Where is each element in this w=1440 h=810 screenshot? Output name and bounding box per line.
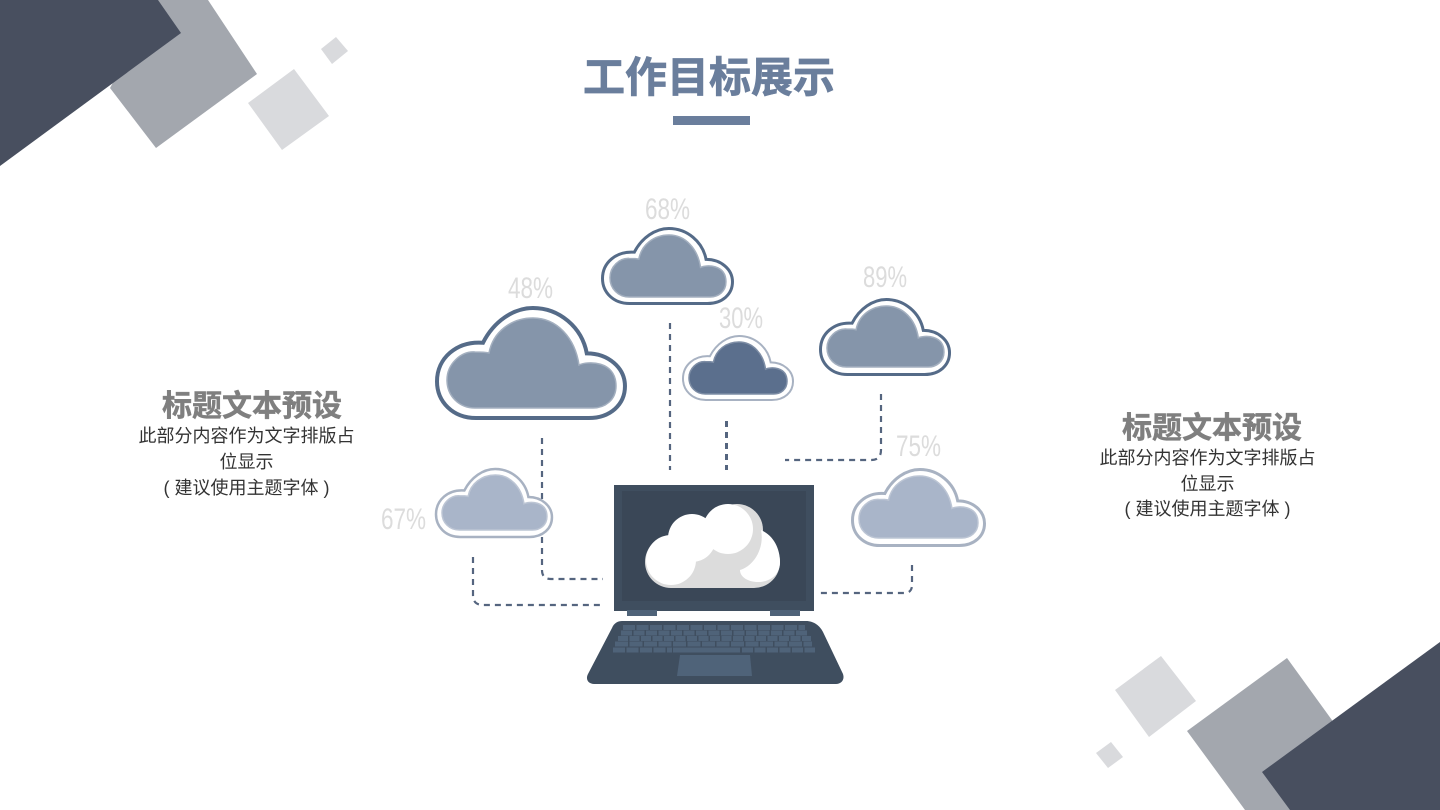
screen cloud icon: [645, 504, 780, 588]
right body text: 此部分内容作为文字排版占: [1100, 448, 1316, 468]
keyboard: [613, 628, 815, 650]
right body text: 位显示: [1180, 474, 1234, 494]
right heading: 标题文本预设: [1122, 412, 1302, 445]
cloud 67%: [436, 469, 552, 537]
label 68%: 68%: [645, 193, 690, 226]
title underline: [673, 116, 750, 125]
left heading: 标题文本预设: [162, 390, 342, 423]
left body text: 位显示: [220, 452, 274, 472]
decoration: bottom-right corner shapes: [1096, 642, 1440, 810]
cloud 75%: [852, 470, 984, 546]
label 67%: 67%: [381, 503, 426, 536]
title: 工作目标展示: [583, 54, 835, 101]
label 30%: 30%: [719, 302, 763, 335]
right text block: [1100, 412, 1316, 519]
left body text: 此部分内容作为文字排版占: [138, 426, 354, 446]
label 89%: 89%: [863, 261, 907, 294]
left body text: ( 建议使用主题字体 ): [164, 478, 330, 498]
label 48%: 48%: [508, 272, 553, 305]
cloud 68%: [602, 228, 732, 304]
dashed connectors: [473, 323, 912, 605]
laptop: [587, 485, 844, 684]
left text block: [138, 390, 354, 498]
laptop hinges: [627, 610, 800, 616]
cloud 89%: [820, 300, 950, 375]
label 75%: 75%: [896, 430, 941, 463]
laptop screen: [614, 485, 814, 611]
cloud 48%: [437, 308, 625, 418]
cloud 30%: [683, 336, 793, 400]
left body text: [138, 426, 354, 498]
right body text: [1100, 448, 1316, 519]
decoration: top-left corner shapes: [0, 0, 348, 166]
right body text: ( 建议使用主题字体 ): [1124, 499, 1290, 519]
laptop base: [587, 621, 844, 684]
trackpad: [677, 655, 752, 676]
